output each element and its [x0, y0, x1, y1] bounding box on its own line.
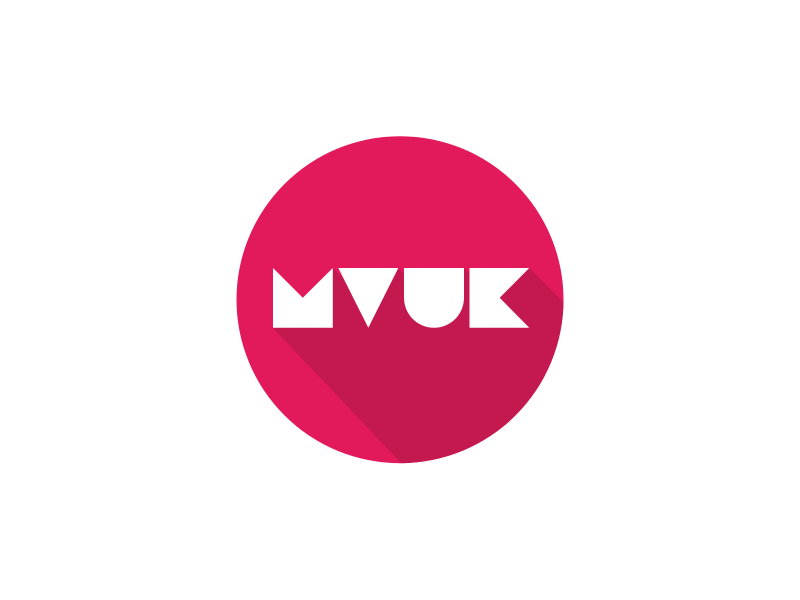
- letter V: [338, 268, 398, 328]
- badge circle: [236, 136, 564, 463]
- letter U: [404, 268, 464, 328]
- logo: MVUK circular badge: [236, 136, 564, 464]
- long shadow: [273, 268, 564, 464]
- letter mark: MVUK: [273, 268, 529, 328]
- letter M: [273, 268, 333, 328]
- letter K: [470, 268, 529, 328]
